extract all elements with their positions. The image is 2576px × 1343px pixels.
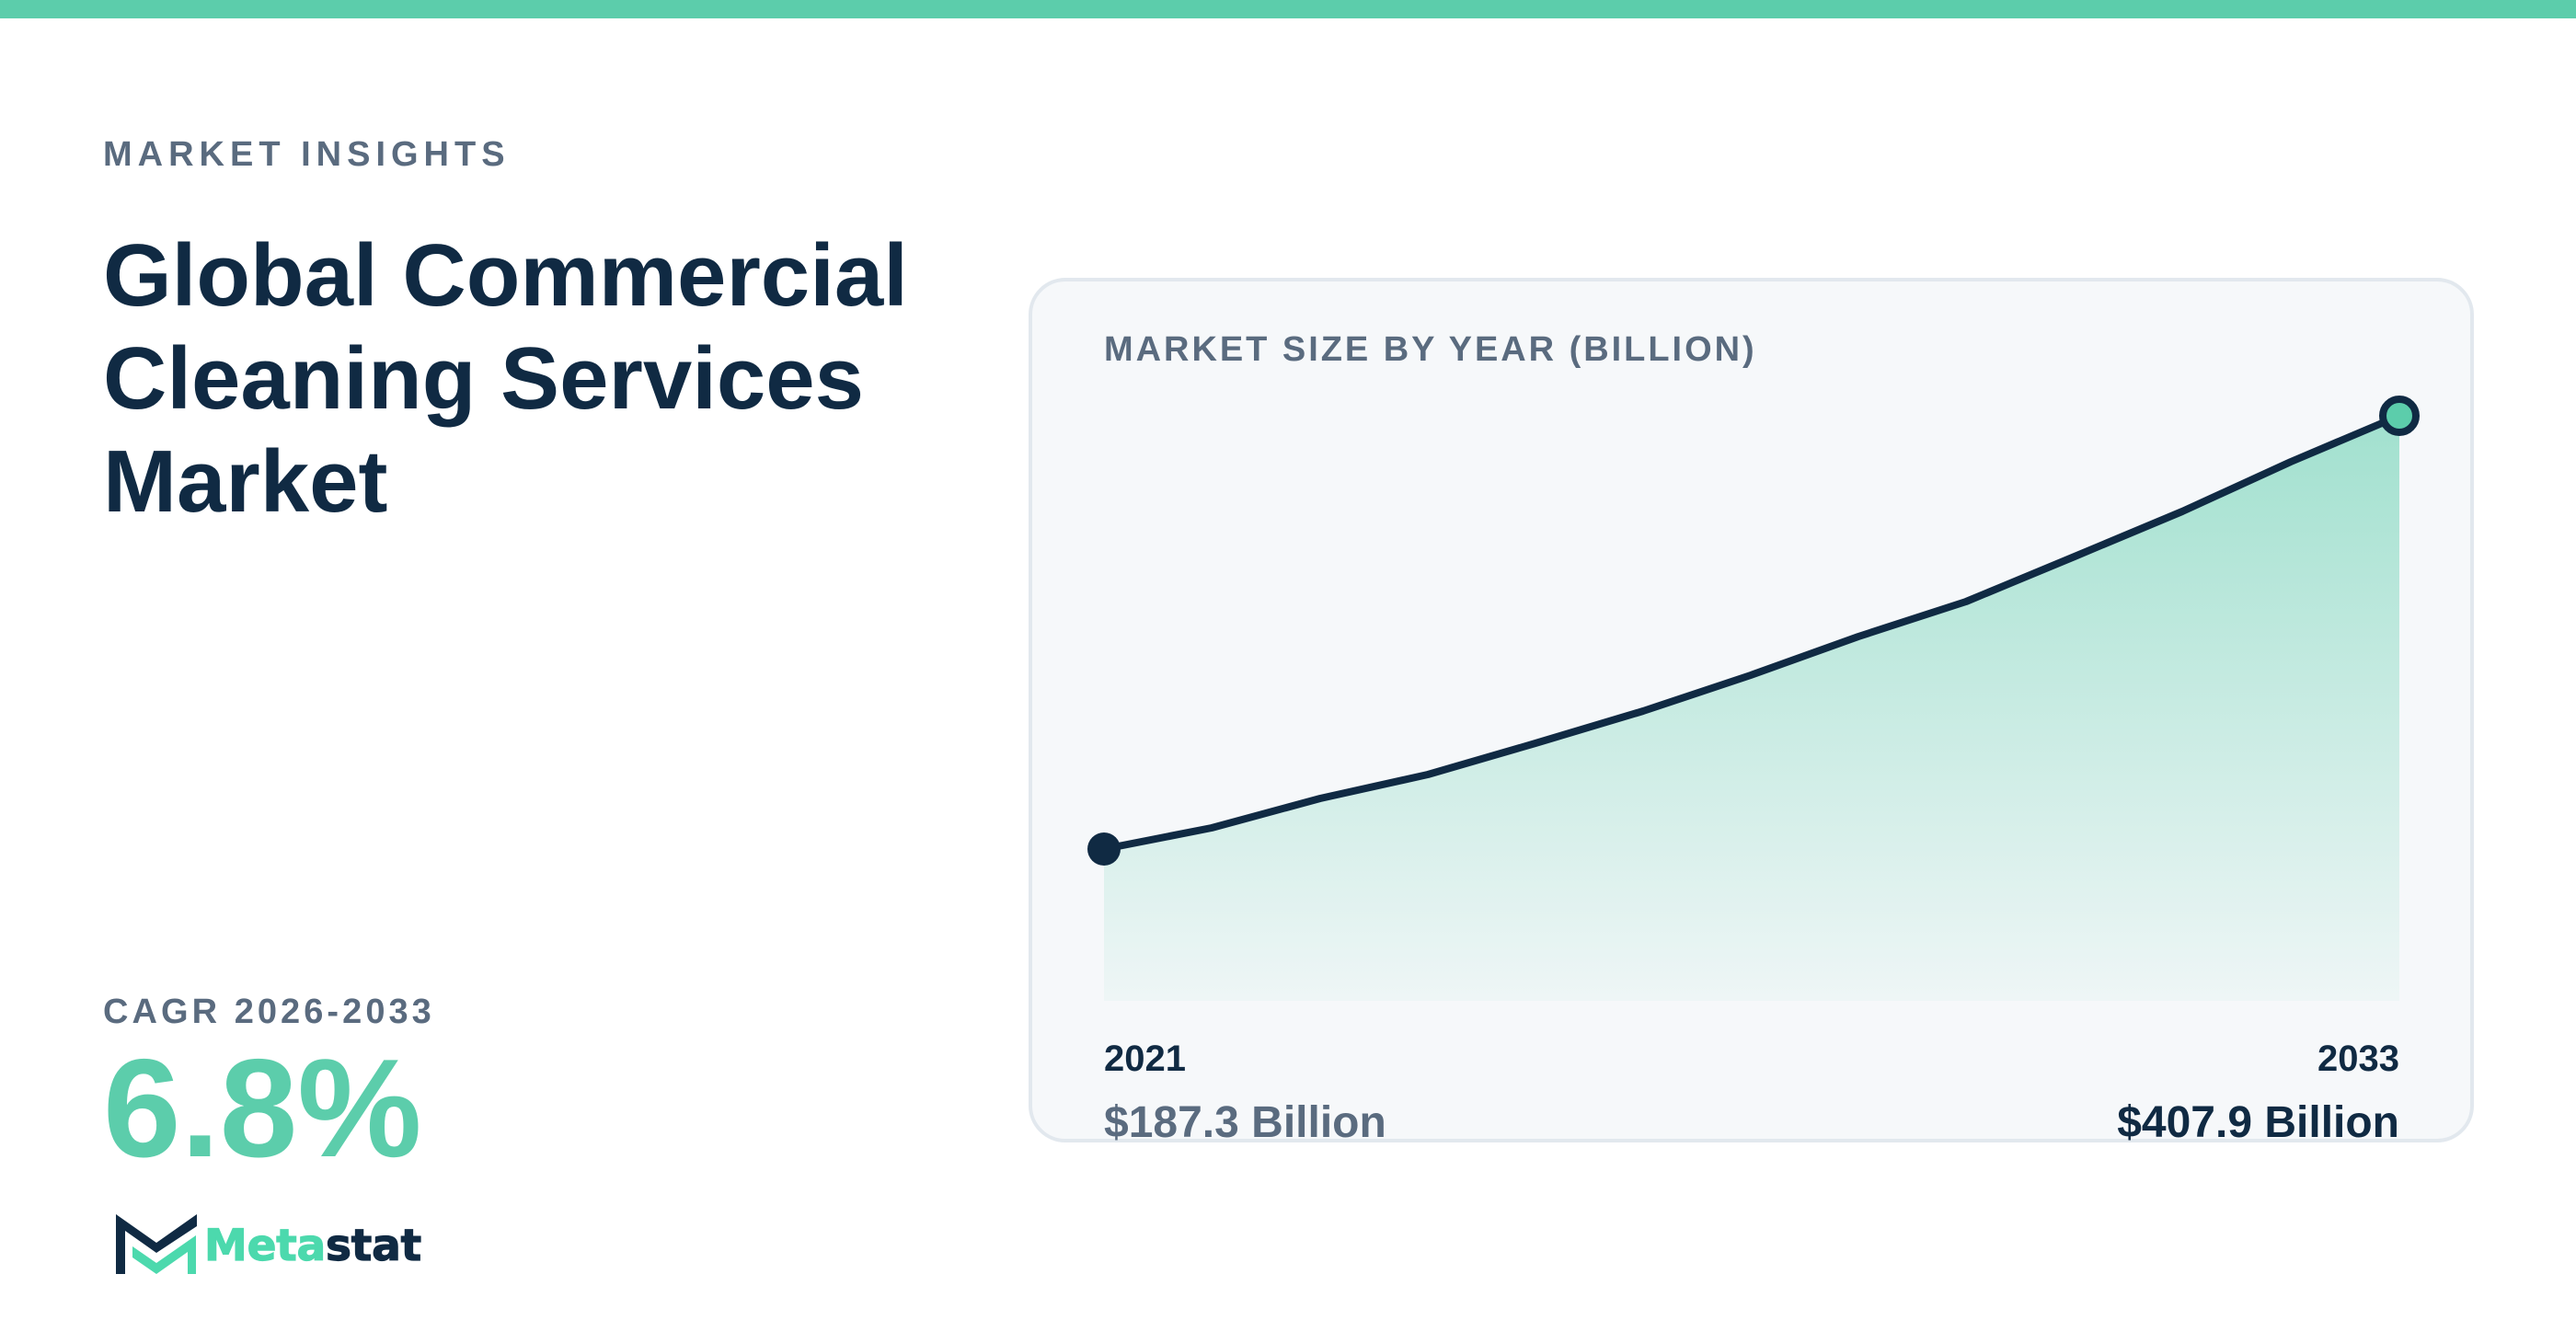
start year label: 2021 — [1104, 1039, 1186, 1079]
title: Global Commercial — [103, 226, 908, 325]
icon: Metastat M mark — [116, 1214, 197, 1274]
end value label: $407.9 Billion — [2117, 1098, 2399, 1147]
start point marker — [1087, 832, 1121, 866]
trend line — [1104, 416, 2399, 849]
title — [103, 226, 908, 531]
area line chart — [1087, 396, 2420, 997]
logo wordmark: Metastat — [204, 1221, 421, 1271]
logo: Metastat — [116, 1214, 421, 1274]
CAGR label: CAGR 2026-2033 — [103, 993, 435, 1031]
area fill — [1104, 416, 2399, 1001]
title: Market — [103, 432, 387, 531]
CAGR value: 6.8% — [103, 1030, 421, 1187]
end year label: 2033 — [2317, 1039, 2399, 1079]
top accent bar — [0, 0, 2576, 18]
end point marker — [2383, 399, 2416, 432]
title: Cleaning Services — [103, 329, 864, 428]
chart heading: MARKET SIZE BY YEAR (BILLION) — [1104, 330, 1757, 369]
eyebrow label: MARKET INSIGHTS — [103, 135, 511, 174]
start value label: $187.3 Billion — [1104, 1098, 1386, 1147]
panel: market size chart card — [1029, 278, 2474, 1142]
